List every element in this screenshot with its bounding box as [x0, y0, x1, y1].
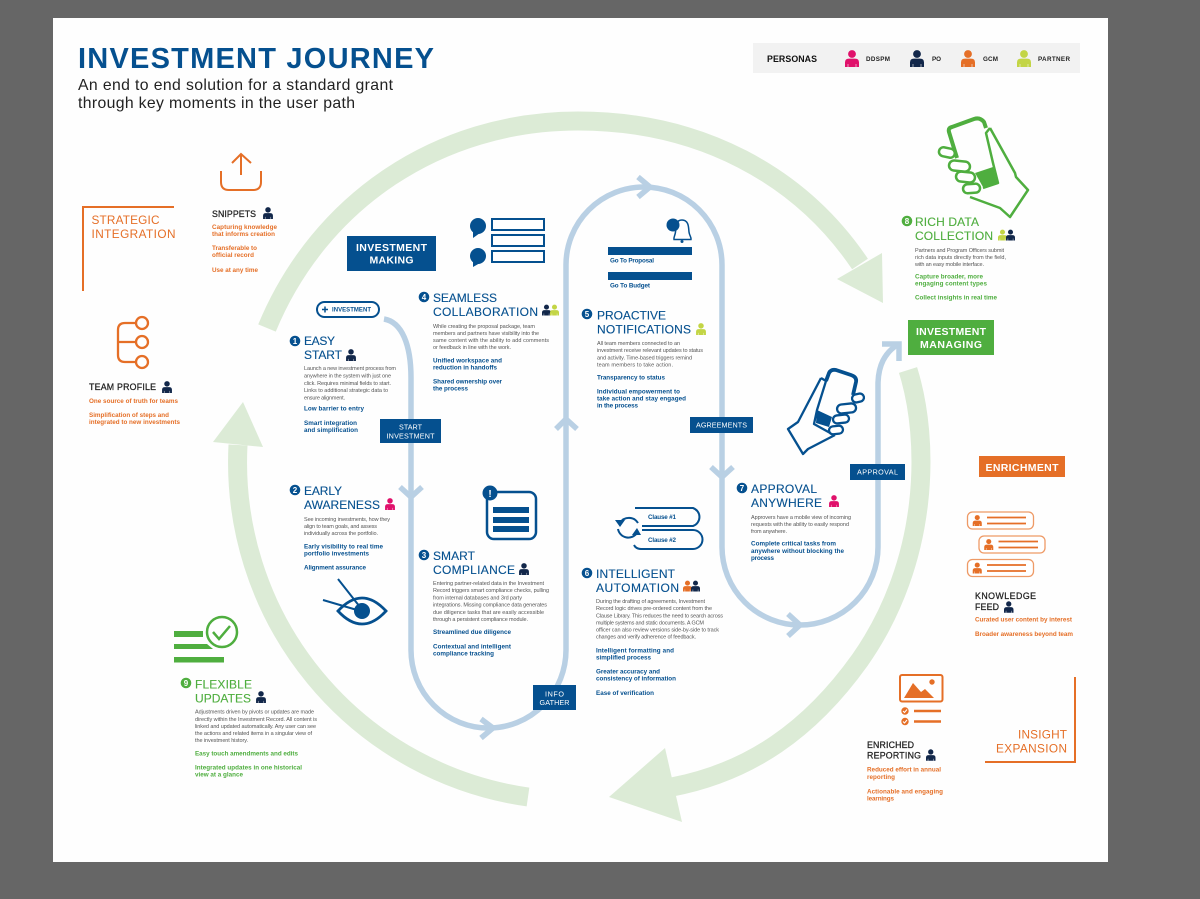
panel: step 8 rich data collection: 8: [905, 217, 910, 226]
panel: step 3 smart compliance: due diligence tasks that are easily accessible: [433, 610, 544, 616]
label: enrichment: [979, 456, 1065, 477]
panel: step 9 flexible updates: 9: [184, 679, 189, 688]
label: enrichment: ENRICHMENT: [986, 462, 1059, 474]
panel: step 6 intelligent automation: Greater accuracy and: [596, 668, 660, 676]
icon: compliance checklist: [482, 486, 536, 539]
label: agreements: AGREEMENTS: [696, 420, 747, 430]
panel: knowledge feed: Broader awareness beyond team: [975, 631, 1073, 638]
panel: step 4 seamless collaboration: or feedback in line with the work.: [433, 345, 511, 351]
label: agreements: [690, 417, 753, 433]
panel: step 3 smart compliance: Streamlined due diligence: [433, 629, 511, 636]
icon: green hand holding phone: [938, 118, 1028, 217]
panel: insight expansion label: EXPANSION: [996, 742, 1067, 756]
panel: step 4 seamless collaboration: 4: [422, 293, 427, 302]
panel: step 7 approval anywhere: Complete critical tasks from: [751, 540, 836, 548]
panel: step 3 smart compliance: through a persistent compliance module.: [433, 617, 528, 623]
panel: step 5 proactive notifications: take action and stay engaged: [597, 396, 686, 402]
panel: step 8 rich data collection: [902, 215, 1015, 302]
panel: knowledge feed: KNOWLEDGE: [975, 591, 1036, 601]
icon: knowledge feed cards: [968, 512, 1045, 576]
icon: eye: [323, 579, 386, 624]
icon: notification bell with links: [608, 218, 692, 290]
panel: step 9 flexible updates: UPDATES: [195, 692, 251, 706]
personas legend: PERSONAS: [767, 54, 817, 64]
panel: team profile: TEAM PROFILE: [89, 382, 156, 392]
panel: step 9 flexible updates: Easy touch amendments and edits: [195, 750, 298, 758]
panel: knowledge feed: FEED: [975, 602, 999, 612]
icon: compliance checklist: !: [488, 489, 492, 500]
panel: strategic integration label: [83, 207, 176, 291]
panel: step 6 intelligent automation: consistency of information: [596, 676, 676, 682]
panel: step 5 proactive notifications: and activity. Time-based triggers remind: [597, 356, 692, 362]
panel: enriched reporting: ENRICHED: [867, 740, 914, 750]
panel: step 7 approval anywhere: ANYWHERE: [751, 496, 822, 510]
label: info gather: INFO: [545, 690, 564, 698]
panel: step 6 intelligent automation: simplified process: [596, 654, 651, 662]
panel: step 1 easy start: ensure alignment.: [304, 396, 345, 402]
panel: step 4 seamless collaboration: members and partners have visibility into the: [433, 331, 539, 337]
title: INVESTMENT JOURNEY: [78, 43, 434, 75]
panel: step 6 intelligent automation: During the drafting of agreements, Investment: [596, 599, 705, 605]
green cycle: top arc with arrow: [267, 121, 883, 328]
panel: step 1 easy start: click. Requires minimal fields to start.: [304, 381, 391, 387]
icon: flexible updates check: [174, 617, 237, 662]
panel: step 2 early awareness: portfolio investments: [304, 550, 369, 558]
panel: enriched reporting: Reduced effort in annual: [867, 766, 941, 774]
label: start investment: START: [399, 422, 423, 432]
panel: step 7 approval anywhere: [737, 482, 851, 562]
panel: enriched reporting: [867, 740, 943, 802]
panel: step 7 approval anywhere: process: [751, 555, 774, 562]
panel: step 3 smart compliance: Record triggers smart compliance checks, pulling: [433, 588, 549, 594]
panel: step 6 intelligent automation: officer can also review versions side-by-side to track: [596, 628, 719, 634]
panel: step 4 seamless collaboration: the process: [433, 386, 468, 392]
label: investment making: INVESTMENT: [356, 242, 428, 254]
panel: step 5 proactive notifications: investment receive relevant updates to status: [597, 348, 703, 354]
panel: step 4 seamless collaboration: Shared ownership over: [433, 378, 503, 386]
panel: insight expansion label: INSIGHT: [1018, 728, 1067, 742]
panel: enriched reporting: learnings: [867, 796, 894, 802]
panel: step 6 intelligent automation: changes and verify adherence of feedback.: [596, 634, 696, 640]
panel: step 5 proactive notifications: All team members connected to an: [597, 341, 680, 347]
panel: enriched reporting: reporting: [867, 774, 895, 781]
icon: blue hand holding phone: [788, 370, 865, 454]
panel: step 9 flexible updates: Integrated updates in one historical: [195, 764, 302, 772]
label: approval: [850, 464, 905, 480]
panel: step 3 smart compliance: Entering partner-related data in the Investment: [433, 581, 544, 587]
panel: step 9 flexible updates: FLEXIBLE: [195, 678, 252, 692]
panel: team profile: integrated to new investments: [89, 419, 180, 426]
label: investment managing: MANAGING: [920, 339, 982, 351]
panel: knowledge feed: [975, 591, 1073, 638]
panel: step 8 rich data collection: COLLECTION: [915, 229, 993, 243]
panel: step 8 rich data collection: with an easy mobile interface.: [914, 262, 984, 268]
panel: step 8 rich data collection: Capture broader, more: [915, 274, 983, 280]
icon: clause swap: Clause #1: [648, 514, 676, 521]
panel: step 2 early awareness: Early visibility to real time: [304, 544, 383, 550]
panel: step 8 rich data collection: engaging content types: [915, 280, 987, 288]
green cycle: left arc with arrow: [213, 402, 528, 797]
green cycle: right arc with arrow: [609, 370, 921, 822]
panel: step 7 approval anywhere: APPROVAL: [751, 482, 817, 496]
panel: step 2 early awareness: individually across the portfolio.: [304, 531, 378, 537]
panel: step 3 smart compliance: Contextual and intelligent: [433, 644, 512, 650]
panel: step 7 approval anywhere: Approvers have a mobile view of incoming: [751, 515, 851, 521]
panel: step 3 smart compliance: integrations. Missing compliance data generates: [433, 602, 547, 608]
panel: step 2 early awareness: See incoming investments, how they: [304, 517, 390, 523]
panel: step 3 smart compliance: [419, 549, 549, 658]
panel: step 3 smart compliance: 3: [422, 551, 427, 560]
panel: step 5 proactive notifications: Transparency to status: [597, 374, 665, 382]
panel: step 1 easy start: Links to additional strategic data to: [304, 388, 388, 394]
label: start investment: INVESTMENT: [386, 432, 435, 440]
panel: step 4 seamless collaboration: While creating the proposal package, team: [433, 324, 535, 330]
personas legend: PO: [932, 56, 941, 63]
panel: step 5 proactive notifications: in the process: [597, 402, 638, 410]
panel: step 1 easy start: anywhere in the system with just one: [304, 374, 391, 380]
panel: step 2 early awareness: AWARENESS: [304, 498, 380, 512]
panel: enriched reporting: Actionable and engaging: [867, 788, 943, 796]
icon: notification bell with links: Go To Budget: [610, 282, 651, 290]
panel: step 9 flexible updates: the investment history.: [195, 738, 248, 744]
panel: step 4 seamless collaboration: COLLABORATION: [433, 305, 538, 319]
panel: step 7 approval anywhere: anywhere without blocking the: [751, 548, 844, 555]
icon: collaboration chat list: [470, 218, 544, 267]
label: investment managing: [908, 320, 994, 355]
panel: step 9 flexible updates: linked and updated automatically. Any user can see: [195, 724, 316, 730]
panel: step 5 proactive notifications: Individual empowerment to: [597, 388, 680, 396]
panel: knowledge feed: Curated user content by interest: [975, 616, 1073, 624]
panel: step 6 intelligent automation: INTELLIGENT: [596, 567, 676, 581]
panel: step 6 intelligent automation: multiple systems and static documents. A GCM: [596, 620, 704, 626]
panel: step 1 easy start: Low barrier to entry: [304, 406, 364, 412]
panel: step 9 flexible updates: the actions and related items in a singular view of: [195, 731, 312, 737]
panel: snippets: that informs creation: [212, 231, 275, 238]
panel: step 7 approval anywhere: from anywhere.: [751, 529, 787, 535]
panel: step 4 seamless collaboration: Unified workspace and: [433, 358, 502, 364]
panel: step 2 early awareness: EARLY: [304, 484, 342, 498]
panel: step 5 proactive notifications: PROACTIVE: [597, 308, 666, 322]
panel: snippets: official record: [212, 252, 254, 259]
panel: snippets: Use at any time: [212, 267, 258, 274]
panel: step 1 easy start: Launch a new investment process from: [304, 366, 396, 372]
icon: enriched report: [900, 675, 942, 725]
icon: clause swap: [615, 508, 703, 549]
panel: step 9 flexible updates: Adjustments driven by pivots or updates are made: [195, 710, 314, 716]
panel: step 3 smart compliance: SMART: [433, 549, 476, 563]
subtitle: through key moments in the user path: [78, 95, 355, 112]
label: info gather: [533, 685, 576, 710]
panel: step 2 early awareness: 2: [293, 486, 298, 495]
panel: step 5 proactive notifications: team members to take action.: [597, 362, 673, 368]
panel: step 4 seamless collaboration: reduction in handoffs: [433, 364, 497, 372]
panel: step 8 rich data collection: Collect insights in real time: [915, 294, 997, 302]
panel: step 8 rich data collection: rich data inputs directly from the field,: [915, 255, 1006, 261]
label: investment making: MAKING: [370, 254, 414, 266]
panel: snippets: [212, 207, 277, 274]
label: start investment: [380, 419, 441, 443]
panel: step 8 rich data collection: Partners and Program Officers submit: [915, 248, 1004, 254]
icon: new investment button: [317, 302, 379, 317]
icon: upload: [221, 154, 261, 190]
panel: step 1 easy start: Smart integration: [304, 420, 357, 427]
panel: step 6 intelligent automation: 6: [585, 569, 590, 578]
panel: step 6 intelligent automation: [582, 567, 723, 697]
panel: step 1 easy start: and simplification: [304, 427, 358, 434]
panel: step 4 seamless collaboration: [419, 291, 559, 392]
panel: snippets: Capturing knowledge: [212, 224, 277, 231]
panel: strategic integration label: INTEGRATION: [92, 227, 176, 241]
panel: enriched reporting: REPORTING: [867, 750, 921, 760]
label: info gather: GATHER: [540, 698, 570, 707]
panel: step 5 proactive notifications: [582, 308, 706, 410]
panel: step 2 early awareness: [290, 484, 395, 572]
panel: step 1 easy start: EASY: [304, 334, 335, 348]
icon: clause swap: Clause #2: [648, 537, 676, 544]
label: approval: APPROVAL: [857, 468, 898, 476]
panel: step 9 flexible updates: [181, 678, 317, 778]
panel: strategic integration label: STRATEGIC: [92, 213, 160, 227]
panel: step 8 rich data collection: RICH DATA: [915, 215, 979, 229]
panel: step 6 intelligent automation: Intelligent formatting and: [596, 648, 674, 654]
panel: step 3 smart compliance: COMPLIANCE: [433, 563, 515, 577]
panel: step 7 approval anywhere: 7: [740, 484, 745, 493]
panel: step 9 flexible updates: view at a glance: [195, 772, 243, 778]
panel: team profile: Simplification of steps and: [89, 412, 169, 419]
subtitle: [78, 77, 394, 112]
panel: step 4 seamless collaboration: SEAMLESS: [433, 291, 497, 305]
label: investment making: [347, 236, 436, 271]
panel: team profile: One source of truth for teams: [89, 398, 178, 405]
panel: step 1 easy start: [290, 334, 396, 434]
personas legend: DDSPM: [866, 56, 890, 63]
panel: step 6 intelligent automation: Clause Library. This reduces the need to search across: [596, 614, 723, 620]
panel: step 3 smart compliance: compliance tracking: [433, 650, 494, 658]
panel: step 1 easy start: START: [304, 348, 343, 362]
panel: step 3 smart compliance: from internal databases and 3rd party: [433, 596, 522, 602]
panel: step 4 seamless collaboration: same content with the ability to add comments: [433, 338, 549, 344]
icon: new investment button: INVESTMENT: [332, 308, 371, 314]
personas legend: [753, 43, 1080, 73]
panel: snippets: Transferable to: [212, 245, 257, 252]
panel: team profile: [89, 381, 180, 426]
blue journey path with arrows: [384, 177, 899, 738]
panel: snippets: SNIPPETS: [212, 209, 256, 219]
panel: step 6 intelligent automation: Record logic drives pre-ordered content from the: [596, 606, 712, 612]
panel: step 6 intelligent automation: Ease of verification: [596, 690, 654, 697]
panel: step 1 easy start: 1: [293, 337, 298, 346]
panel: step 2 early awareness: Alignment assurance: [304, 564, 366, 572]
panel: step 6 intelligent automation: AUTOMATION: [596, 581, 679, 595]
panel: step 5 proactive notifications: 5: [585, 310, 590, 319]
panel: insight expansion label: [985, 677, 1075, 762]
panel: step 5 proactive notifications: NOTIFICATIONS: [597, 322, 691, 336]
panel: step 7 approval anywhere: requests with the ability to easily respond: [751, 522, 849, 528]
icon: team profile: [118, 317, 148, 368]
panel: step 2 early awareness: align to team goals, and assess: [304, 524, 377, 530]
panel: step 9 flexible updates: directly within the Investment Record. All content is: [195, 717, 317, 723]
label: investment managing: INVESTMENT: [916, 326, 987, 338]
personas legend: PARTNER: [1038, 56, 1070, 63]
subtitle: An end to end solution for a standard grant: [78, 77, 394, 94]
icon: notification bell with links: Go To Proposal: [610, 258, 654, 264]
personas legend: GCM: [983, 56, 998, 63]
